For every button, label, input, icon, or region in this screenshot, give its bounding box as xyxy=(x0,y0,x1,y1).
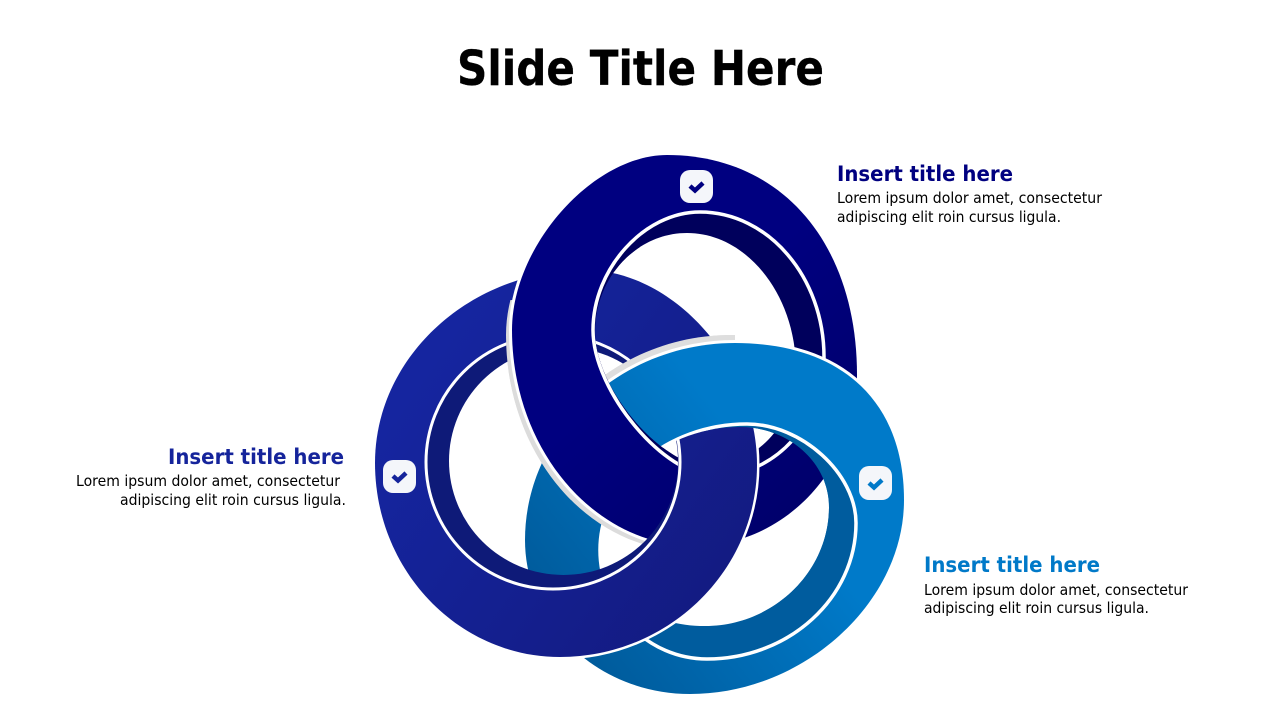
text block: light blue ring xyxy=(924,553,1189,617)
body text: Lorem ipsum dolor amet, consectetur xyxy=(837,189,1103,207)
text block: blue ring xyxy=(76,445,346,509)
ring: navy overlap on top xyxy=(506,158,673,500)
heading: Insert title here xyxy=(168,445,344,470)
ring: navy base layer xyxy=(506,155,857,551)
icon: light blue ring check xyxy=(859,466,892,500)
title: Slide Title Here xyxy=(457,41,824,97)
diagram: three interlocked rings xyxy=(375,155,904,694)
body text xyxy=(76,472,346,509)
icon: navy ring check xyxy=(680,170,713,203)
heading: Insert title here xyxy=(837,162,1013,187)
body text xyxy=(924,581,1189,617)
ring: royal blue xyxy=(375,270,757,657)
ring: light blue overlap on top xyxy=(605,336,860,648)
body text: adipiscing elit roin cursus ligula. xyxy=(924,599,1149,617)
body text: Lorem ipsum dolor amet, consectetur xyxy=(76,472,341,490)
icon: blue ring check xyxy=(383,460,416,493)
ring: light blue base layer xyxy=(521,335,904,694)
text block: navy ring xyxy=(837,162,1103,226)
heading: Insert title here xyxy=(924,553,1100,578)
body text xyxy=(837,189,1103,226)
body text: adipiscing elit roin cursus ligula. xyxy=(837,208,1061,226)
body text: adipiscing elit roin cursus ligula. xyxy=(120,491,346,509)
body text: Lorem ipsum dolor amet, consectetur xyxy=(924,581,1189,599)
